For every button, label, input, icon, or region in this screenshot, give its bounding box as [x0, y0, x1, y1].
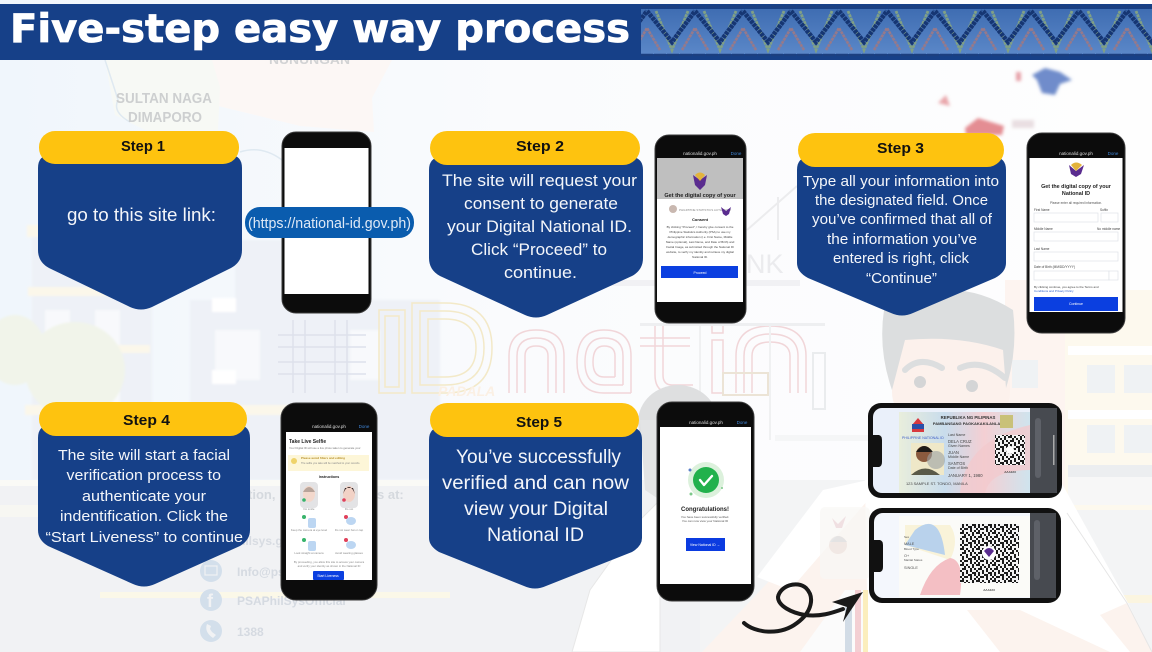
panel: step 4: indentification. Click the	[60, 508, 228, 525]
panel: step 5: You’ve successfully	[456, 447, 621, 468]
phone: digital ID back	[869, 508, 1061, 603]
panel: step 2: continue.	[504, 263, 577, 282]
phone: step 4 selfie screen: The selfie you take will be matched to your records.	[301, 461, 360, 465]
background: faded map and street scene: NK	[746, 249, 784, 279]
phone: step 3 form screen: Please enter all required information.	[1050, 201, 1102, 205]
phone: step 3 form screen: By clicking continue, you agree to the Terms and	[1034, 285, 1099, 289]
phone: step 2 consent screen: Proceed	[693, 271, 707, 275]
phone: digital ID front: REPUBLIKA NG PILIPINAS	[941, 415, 996, 420]
phone: digital ID back: O+	[904, 554, 910, 558]
panel: step 5: view your Digital	[464, 499, 608, 520]
phone: step 4 selfie screen	[281, 403, 377, 600]
panel: step 5: National ID	[487, 525, 584, 546]
phone: step 2 consent screen: nationalid.gov.ph	[683, 151, 717, 156]
phone: step 4 selfie screen: Please avoid filters and editing	[301, 456, 345, 460]
phone: step 4 selfie screen: Your Digital ID will use a live photo taken to generate your	[289, 446, 361, 450]
phone: step 2 consent screen: By clicking "Proceed", I hereby give consent to the	[667, 225, 734, 229]
phone: digital ID front: Last Name	[948, 433, 965, 437]
phone: step 2 consent screen: Consent	[692, 217, 709, 222]
contact details, faded: tion,	[248, 487, 275, 502]
phone: digital ID front: 123 SAMPLE ST. TONDO, MANILA	[906, 481, 968, 486]
panel: step 3: entered is right, click	[833, 250, 969, 267]
phone: step 4 selfie screen: Instructions	[319, 475, 339, 479]
panel: step 2: consent to generate	[464, 194, 618, 213]
title: Five-step easy way process	[10, 7, 630, 52]
phone: step 4 selfie screen: By proceeding, you allow this site to access your camera	[294, 560, 365, 564]
phone: step 2 consent screen: PHILIPPINE STATISTICS AUTHORITY	[679, 208, 731, 212]
contact details, faded: hilsys.gov.ph	[238, 534, 314, 548]
phone: step 4 selfie screen: Keep the camera at eye level	[291, 528, 327, 532]
watermark logo	[278, 303, 806, 393]
link pill	[245, 207, 414, 238]
panel: step 2: The site will request your	[442, 171, 637, 190]
contact details, faded	[200, 487, 404, 642]
phone: step 3 form screen: Get the digital copy of your	[1041, 184, 1112, 190]
panel: step 3: Step 3	[877, 140, 924, 157]
contact details, faded: f	[207, 591, 214, 611]
phone: digital ID front: Given Names	[948, 444, 970, 448]
phone: step 5 success screen: Congratulations!	[681, 507, 729, 513]
panel: step 3: “Continue”	[866, 270, 937, 287]
phone: step 2 consent screen: Facial Image, as submitted through the National ID	[666, 245, 735, 249]
phone: step 4 selfie screen: Done	[359, 424, 370, 429]
panel: step 4: Step 4	[123, 412, 171, 429]
phone: step 5 success screen: View National ID →	[690, 543, 720, 547]
panel: step 5: verified and can now	[442, 473, 629, 494]
phone: digital ID back: Marital Status	[904, 558, 923, 562]
panel: step 3	[797, 133, 1006, 316]
arrow	[744, 584, 863, 632]
phone: step 3 form screen: Date of Birth (MM/DD/YYYY)	[1034, 265, 1075, 269]
phone: digital ID back: Blood Type	[904, 547, 919, 551]
phone: step 3 form screen: Middle Name	[1034, 227, 1053, 231]
phone: step 2 consent screen: Done	[731, 151, 742, 156]
panel: step 1: Step 1	[121, 138, 165, 155]
panel: step 2: your Digital National ID.	[447, 217, 632, 236]
phone: step 2 consent screen	[655, 135, 746, 323]
illustrated man holding ID, faded	[572, 290, 1152, 652]
background: faded map and street scene: DIMAPORO	[128, 110, 202, 126]
phone: step 3 form screen: Continue	[1069, 302, 1083, 306]
panel: step 3: Type all your information into	[803, 173, 999, 190]
panel: step 2: Step 2	[516, 138, 564, 155]
phone: digital ID front: SANTOS	[948, 461, 965, 466]
contact details, faded: s at:	[377, 487, 404, 502]
phone: step 3 form screen: No middle name	[1097, 227, 1120, 231]
panel: step 3: the designated field. Once	[815, 192, 988, 209]
phone: digital ID front: JUAN	[948, 450, 959, 455]
phone: step 4 selfie screen: nationalid.gov.ph	[312, 424, 346, 429]
panel: step 2: Click “Proceed” to	[471, 240, 607, 259]
phone: step 3 form screen: Last Name	[1034, 247, 1050, 251]
panel: step 1: go to this site link:	[67, 205, 216, 225]
phone: step 5 success screen	[657, 402, 754, 601]
panel: step 5: Step 5	[516, 414, 562, 431]
panel: step 1	[38, 131, 242, 310]
contact details, faded: 1388	[237, 625, 264, 639]
phone: step 5 success screen: nationalid.gov.ph	[689, 420, 723, 425]
link pill: (https://national-id.gov.ph)	[248, 215, 411, 232]
phone: digital ID front: JANUARY 1, 1980	[948, 473, 983, 478]
panel: step 4	[38, 402, 250, 586]
phone: digital ID front: DELA CRUZ	[948, 439, 972, 444]
phone: step 4 selfie screen: Look straight at camera	[294, 551, 324, 555]
panel: step 4: “Start Liveness” to continue	[46, 529, 243, 546]
phone: step 3 form screen: First Name	[1034, 208, 1050, 212]
phone: digital ID back: AAA123	[983, 588, 995, 592]
panel: step 5	[429, 403, 642, 588]
panel: step 4: verification process to	[66, 467, 221, 484]
panel: step 3: the information you’ve	[827, 231, 977, 248]
phone: step 3 form screen: Done	[1108, 151, 1119, 156]
background: faded map and street scene: PADALA	[438, 383, 495, 399]
phone: step 3 form screen: Conditions and Privacy Policy	[1034, 289, 1074, 293]
phone: step 4 selfie screen: Take Live Selfie	[289, 439, 326, 445]
phone: digital ID front: AAA123	[1004, 470, 1016, 474]
phone: step 4 selfie screen: Avoid wearing glasses	[335, 551, 363, 555]
phone: digital ID back: SINGLE	[904, 566, 918, 570]
phone: step 3 form screen: nationalid.gov.ph	[1059, 151, 1093, 156]
phone: step 2 consent screen: website, to verify my identity and retrieve my digital	[666, 250, 734, 254]
panel: step 4: authenticate your	[82, 488, 206, 505]
phone: step 5 success screen: Done	[737, 420, 748, 425]
phone: step 4 selfie screen: Do not	[345, 507, 353, 511]
phone: step 2 consent screen: Philippine Statistics Authority (PSA) to use my	[669, 230, 731, 234]
phone: digital ID front: Date of Birth	[948, 466, 968, 470]
phone: step 5 success screen: You have been successfully verified.	[681, 515, 729, 519]
phone: step 5 success screen: You can now view your National ID	[682, 519, 729, 523]
phone: step 3 form screen: Suffix	[1100, 208, 1108, 212]
phone: step 4 selfie screen: Do smile	[304, 507, 315, 511]
title banner	[0, 4, 1152, 60]
phone: digital ID back: Sex	[904, 535, 910, 539]
phone: step 4 selfie screen: Do not wear hat or cap	[335, 528, 364, 532]
phone: digital ID front: Middle Name	[948, 455, 969, 459]
phone: step 2 consent screen: National ID.	[692, 255, 708, 259]
woven pattern strip	[641, 7, 1152, 55]
phone: digital ID front: PAMBANSANG PAGKAKAKILANLAN	[933, 421, 1003, 426]
phone: step 3 form screen	[1027, 133, 1125, 333]
phone: digital ID front: PHILIPPINE NATIONAL ID	[902, 436, 944, 440]
phone: step 3 form screen: National ID	[1062, 191, 1090, 197]
panel: step 4: The site will start a facial	[58, 447, 230, 464]
phone: step 2 consent screen: Get the digital copy of your	[664, 193, 736, 199]
held ID card	[820, 507, 870, 579]
background: faded map and street scene: SULTAN NAGA	[116, 91, 212, 107]
phone: digital ID back: MALE	[904, 542, 915, 546]
phone: step 4 selfie screen: and verify your identity as shown in the National ID	[298, 564, 360, 568]
phone: step 2 consent screen: Name (optional), Last Name, and Date of Birth) and	[666, 240, 735, 244]
phone: step 1 blank screen	[282, 132, 371, 313]
panel: step 2	[429, 131, 643, 318]
contact details, faded: PSAPhilSysOfficial	[237, 594, 346, 608]
phone: step 4 selfie screen: Start Liveness	[317, 574, 339, 578]
phone: step 2 consent screen: demographic information (i.e. First Name, Middle	[668, 235, 733, 239]
phone: digital ID front	[868, 403, 1062, 498]
contact details, faded: Info@psa.gov.ph	[237, 565, 333, 579]
background: faded map and street scene: NUNUNGAN	[269, 52, 350, 67]
panel: step 3: you’ve confirmed that all of	[812, 211, 993, 228]
